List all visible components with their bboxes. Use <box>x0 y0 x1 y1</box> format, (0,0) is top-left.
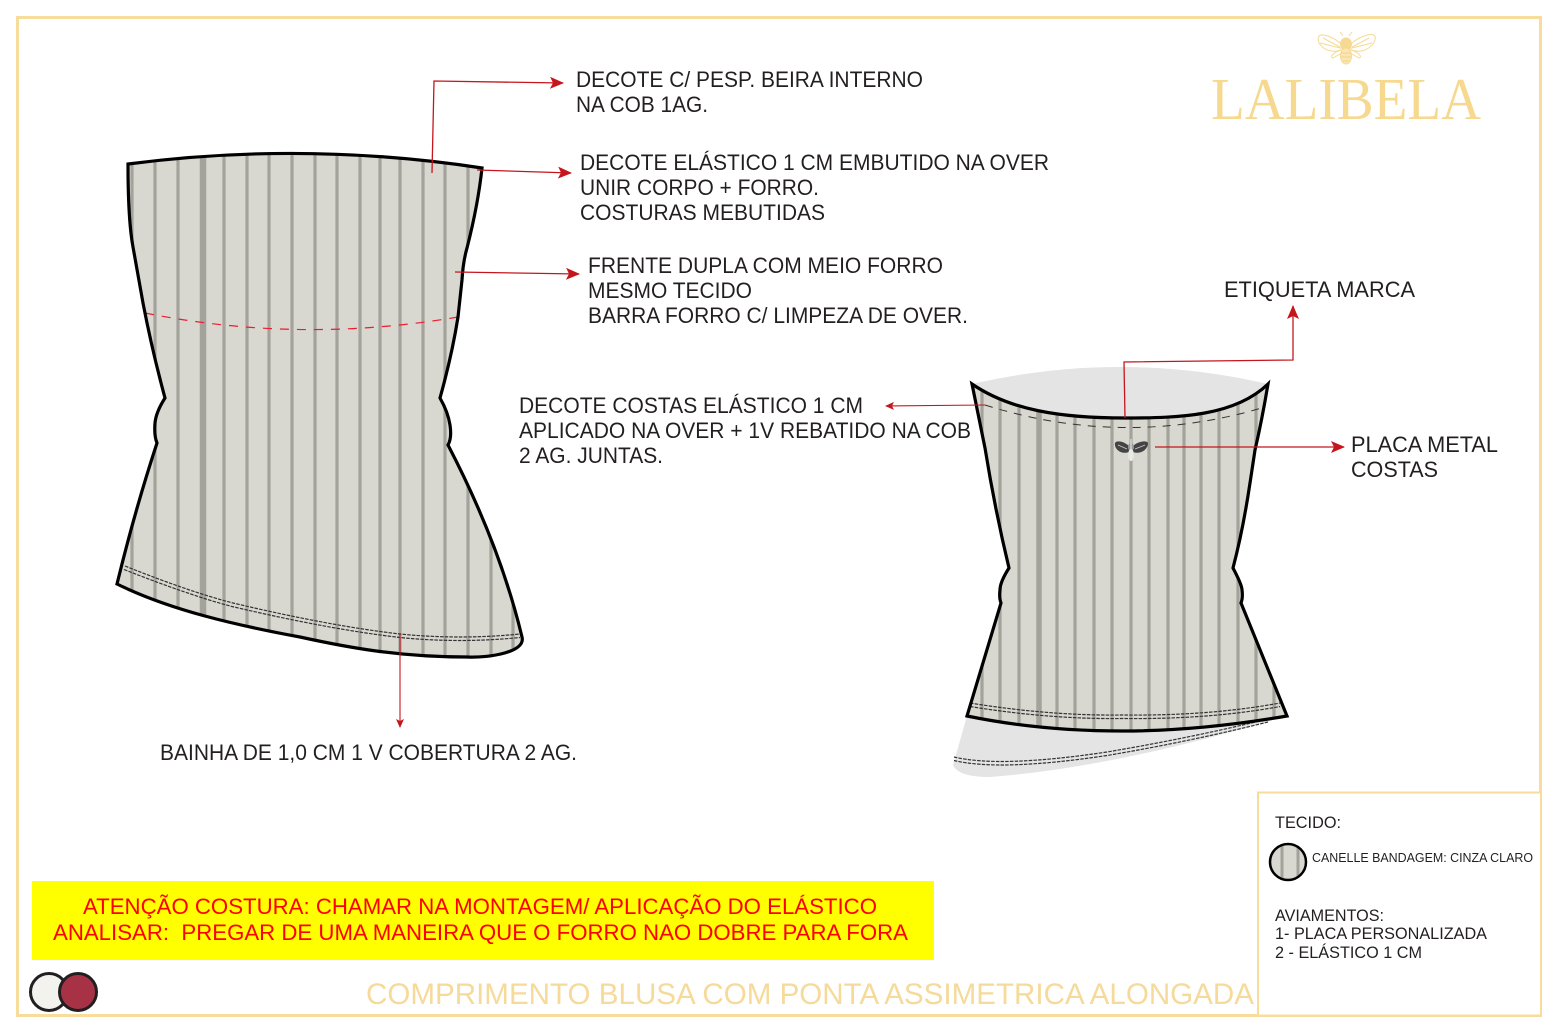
icon: bee <box>1318 32 1375 64</box>
arrow: bainha <box>399 634 401 727</box>
panel: materials <box>1258 792 1541 1016</box>
text: decote elastico: DECOTE ELÁSTICO 1 CM EMBUTIDO NA OVER <box>580 150 1049 175</box>
garment: front view <box>117 150 522 670</box>
arrow: etiqueta marca <box>1124 306 1293 418</box>
footer title: COMPRIMENTO BLUSA COM PONTA ASSIMETRICA ALONGADA <box>366 978 1254 1011</box>
back hem (long tip) <box>953 716 1273 777</box>
trims list: 1- PLACA PERSONALIZADA <box>1275 925 1487 943</box>
text: placa metal: COSTAS <box>1351 457 1438 482</box>
icon: fabric swatch <box>1270 840 1306 884</box>
text: frente dupla <box>588 253 968 328</box>
callout: atenção costura <box>32 881 934 960</box>
trims list: 2 - ELÁSTICO 1 CM <box>1275 943 1422 962</box>
callout: atenção costura: ATENÇÃO COSTURA: CHAMAR NA MONTAGEM/ APLICAÇÃO DO ELÁSTICO <box>83 894 877 919</box>
text: bainha: BAINHA DE 1,0 CM 1 V COBERTURA 2 AG. <box>160 740 577 765</box>
text: decote costas: DECOTE COSTAS ELÁSTICO 1 CM <box>519 393 863 418</box>
logo wordmark: LALIBELA <box>1211 66 1481 132</box>
arrow: decote elastico <box>477 170 571 173</box>
color swatches <box>30 974 96 1010</box>
garment: back view <box>953 367 1287 777</box>
arrow: frente dupla <box>455 272 579 274</box>
text: frente dupla: BARRA FORRO C/ LIMPEZA DE OVER. <box>588 303 968 328</box>
text: decote c/ pesp: NA COB 1AG. <box>576 92 708 117</box>
text: decote c/ pesp: DECOTE C/ PESP. BEIRA INTERNO <box>576 67 923 92</box>
text: decote elastico: COSTURAS MEBUTIDAS <box>580 200 825 225</box>
arrow: decote costas <box>886 405 985 406</box>
text: decote c/ pesp <box>576 67 923 117</box>
text: decote costas <box>519 393 971 468</box>
arrow: decote beira <box>432 81 563 173</box>
trims list: AVIAMENTOS: <box>1275 907 1384 925</box>
logo: Lalibela <box>1211 32 1481 132</box>
text: frente dupla: FRENTE DUPLA COM MEIO FORRO <box>588 253 943 278</box>
fabric name: CANELLE BANDAGEM: CINZA CLARO <box>1312 850 1533 865</box>
text: frente dupla: MESMO TECIDO <box>588 278 752 303</box>
callout: atenção costura: ANALISAR: PREGAR DE UMA MANEIRA QUE O FORRO NAO DOBRE PARA FORA <box>53 920 908 945</box>
text: placa metal <box>1351 432 1498 482</box>
text: etiqueta marca: ETIQUETA MARCA <box>1224 277 1415 302</box>
trims list <box>1275 907 1487 962</box>
heading: tecido: TECIDO: <box>1275 814 1341 832</box>
arrow: placa metal <box>1155 446 1344 448</box>
icon: metal bee plate <box>1115 439 1148 461</box>
text: decote costas: 2 AG. JUNTAS. <box>519 443 663 468</box>
text: decote elastico <box>580 150 1049 225</box>
back panel top (inside) <box>972 367 1268 418</box>
text: decote costas: APLICADO NA OVER + 1V REBATIDO NA COB <box>519 418 971 443</box>
text: decote elastico: UNIR CORPO + FORRO. <box>580 175 819 200</box>
text: placa metal: PLACA METAL <box>1351 432 1498 457</box>
